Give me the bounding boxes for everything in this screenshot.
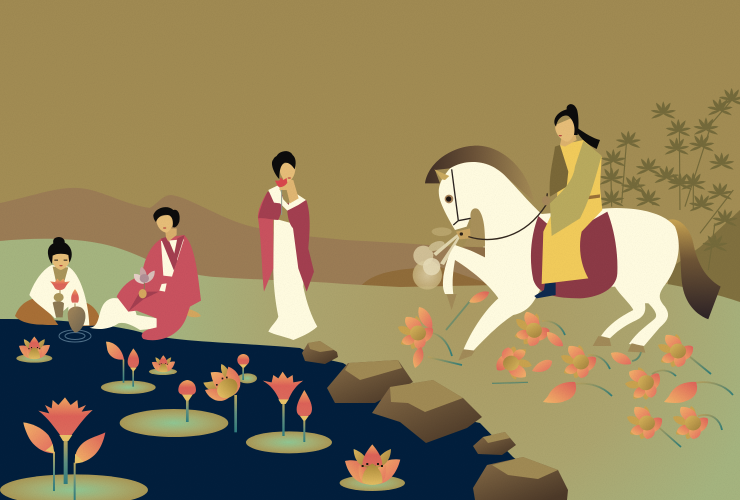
ponytail [577,127,600,149]
hair [153,207,180,227]
hand [139,289,147,298]
flower stem [280,190,283,215]
mouth [559,135,562,136]
fallen lotus flowers [398,309,708,439]
olive sleeve [550,141,602,236]
floating blooms [345,444,400,485]
white collar [268,185,306,211]
left sleeve [258,192,273,292]
muzzle [456,228,471,239]
saddle [531,212,617,298]
white lotus [134,267,155,289]
round small bud [237,354,249,368]
sash [159,283,167,292]
large right bud [75,432,105,463]
hand [542,196,550,205]
rocks [302,341,568,500]
bamboo [599,88,740,270]
seated woman in white [15,237,100,333]
tilted bud [106,342,124,360]
hair [272,151,296,179]
red robe [117,235,201,340]
dark sleeve [550,145,568,197]
pond water [0,319,530,500]
fallen buds and petals [413,291,697,403]
eye [445,195,453,203]
seated woman in red [89,207,201,340]
white chest [161,239,184,277]
robe [29,265,89,325]
boot [534,283,556,298]
horse breath puffs [413,227,460,290]
lily pads [0,354,405,500]
white dress [268,218,317,340]
standing woman [258,151,317,340]
horse and rider [413,104,721,361]
ear [434,169,449,180]
vase [68,307,85,333]
round bud [178,380,196,401]
ground [0,239,740,500]
head [51,253,70,270]
tail [665,219,721,319]
gap between jaw and leg [463,208,485,247]
flower [275,177,287,187]
vase held [53,301,64,317]
small bud [128,348,139,371]
dark collar [161,237,177,271]
lips [163,227,166,229]
bud [297,390,312,421]
neck [165,228,177,242]
neck and hand [279,178,299,203]
bud in vase [71,289,79,303]
white skirt [89,298,157,330]
mane [425,146,534,202]
bridle [452,169,471,225]
sleeve fold [128,292,159,312]
neck [560,133,577,147]
belt [588,194,600,199]
robe [542,140,602,284]
hooves [447,294,457,310]
hair [48,237,72,264]
large left bud [23,422,54,453]
hair and topknot [554,104,578,135]
chest [53,267,68,282]
fallen stems [425,301,733,447]
stems [53,359,305,500]
tall lotus [263,372,303,404]
lips [59,265,63,266]
horse body [439,162,679,352]
flower held [50,279,70,290]
turned bloom [203,364,242,402]
large lotus [38,397,93,441]
skirt [15,297,58,325]
face [156,214,174,233]
foot [184,308,201,317]
hand [54,293,64,302]
eyes [54,259,67,262]
right sleeve [290,200,314,292]
face [279,163,295,183]
flower stems [60,290,75,310]
ripples [59,330,91,342]
reins [468,193,547,239]
lotus pads and flowers [0,337,405,500]
face [555,117,576,142]
lips [288,177,291,179]
distant mountains [0,188,740,310]
